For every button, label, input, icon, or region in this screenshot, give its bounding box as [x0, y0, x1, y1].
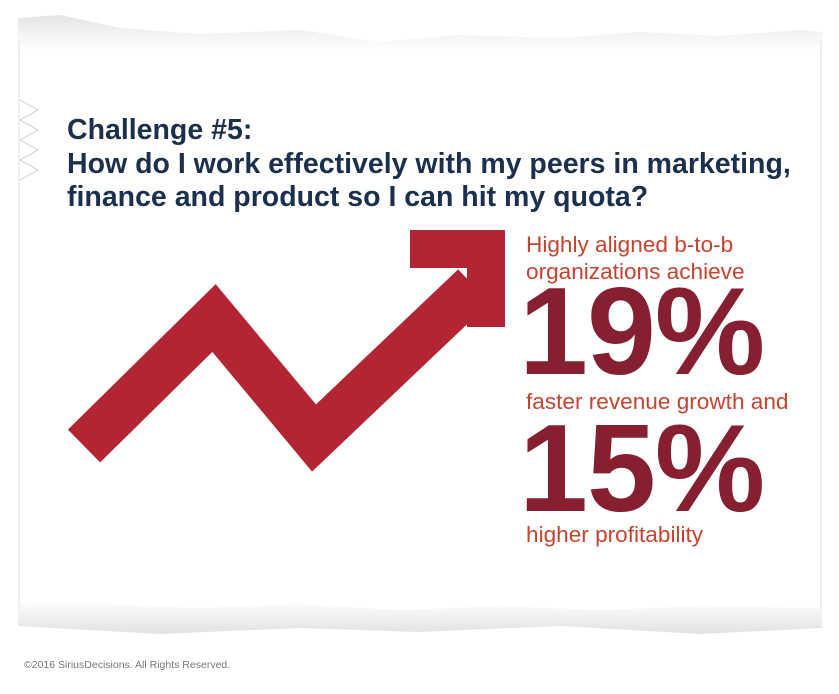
- icon: triangle pattern: [20, 100, 39, 180]
- text: intro: [526, 232, 745, 284]
- stat: 19%: 19%: [519, 263, 764, 401]
- text: higher profitability: higher profitability: [526, 522, 703, 547]
- footer: ©2016 SiriusDecisions. All Rights Reserved.: [24, 659, 230, 671]
- text: intro: Highly aligned b-to-b: [526, 232, 733, 257]
- title: Challenge #5:: [67, 114, 252, 146]
- text: faster revenue growth: faster revenue growth and: [526, 389, 788, 414]
- text: intro: organizations achieve: [526, 259, 745, 284]
- title: How do I work effectively with my peers in marketing,: [67, 148, 791, 180]
- title: [67, 114, 791, 213]
- stat: 15%: 15%: [519, 400, 764, 538]
- title: finance and product so I can hit my quota?: [67, 181, 648, 213]
